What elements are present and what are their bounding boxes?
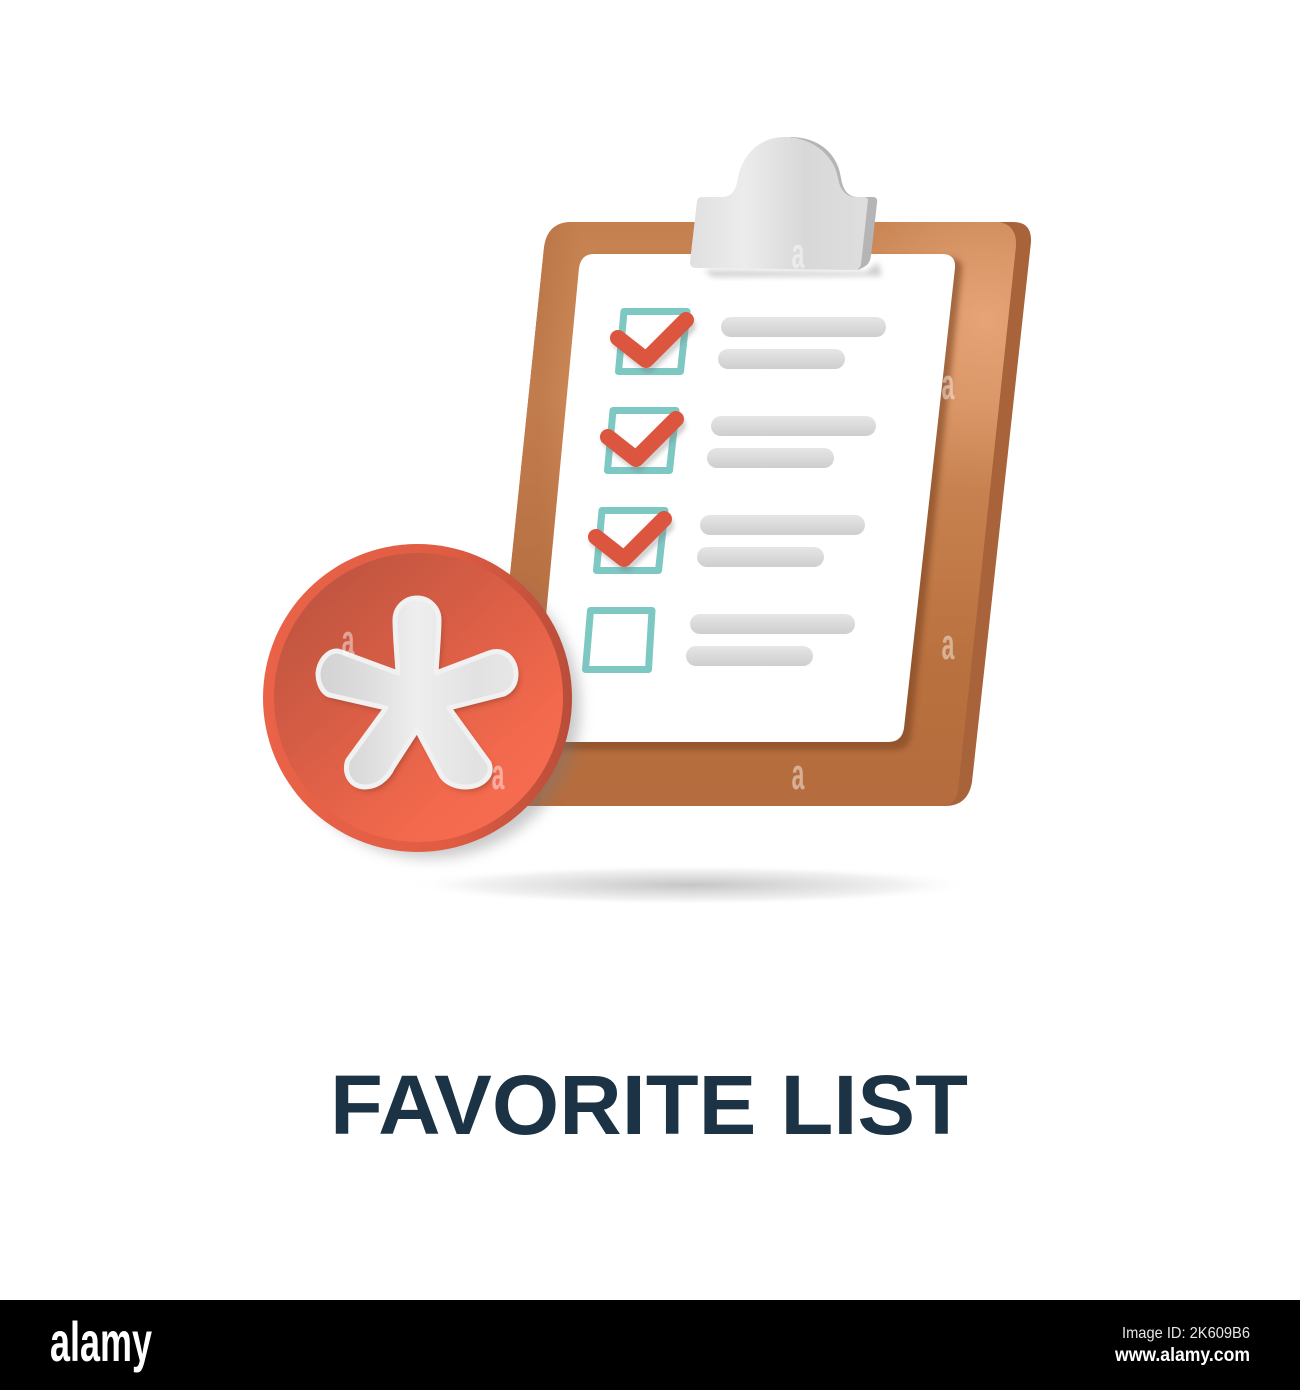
watermark marks: a [792,229,805,278]
floor shadow [405,865,975,905]
checkbox [608,410,676,470]
check mark [596,519,664,559]
clip front [690,137,868,270]
text line [697,547,824,567]
check mark [608,419,676,459]
clip side [790,137,877,270]
asterisk shadow [321,602,519,791]
badge rim [263,544,572,852]
watermark marks: a [792,750,805,799]
checklist row 4 [586,610,855,670]
watermark marks: a [942,620,955,669]
checklist row 3 [596,510,865,570]
badge face [274,553,563,842]
clip shadow [704,262,882,277]
check mark [618,320,686,360]
watermark marks: a [492,750,505,799]
checklist row 2 [608,410,876,470]
watermark marks: a [342,616,355,665]
check mark shadow [620,326,688,365]
paper sheet [534,254,955,742]
checkbox [596,510,665,570]
text line [686,646,813,666]
badge shadow [280,558,580,858]
title: FAVORITE LIST [330,1058,968,1152]
checkbox [586,610,652,670]
check mark shadow [610,425,678,464]
image id: Image ID: 2K609B6 [1122,1325,1250,1342]
footer bar [0,1300,1300,1390]
text line [690,614,855,634]
asterisk [318,598,516,787]
checklist row 1 [618,312,886,372]
metal clip [690,137,882,277]
checkbox [618,312,687,372]
text line [700,515,865,535]
favorite badge [263,544,580,858]
paper shadow [540,258,962,750]
clipboard board [486,222,1031,806]
text line [711,416,876,436]
text line [707,448,834,468]
text line [721,317,886,337]
clipboard [486,137,1031,806]
watermark marks [342,229,955,799]
alamy logo: alamy [50,1310,152,1373]
watermark marks: a [942,360,955,409]
check mark shadow [598,525,666,564]
website: www.alamy.com [1114,1345,1250,1366]
text line [718,349,845,369]
